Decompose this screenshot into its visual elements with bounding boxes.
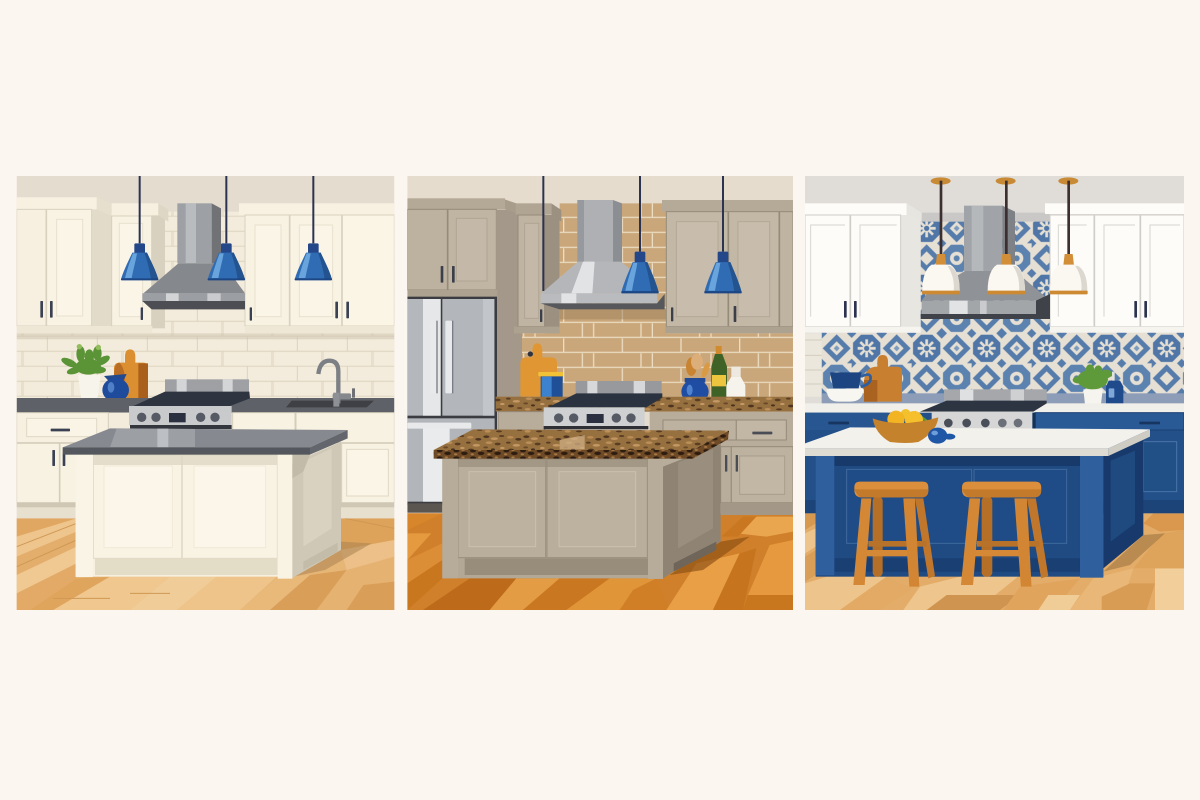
wood floor [17,518,394,610]
subway tile backsplash [17,212,394,402]
island [63,428,348,579]
stove [129,379,250,429]
upper cabinet beside hood [112,203,168,333]
cutting board [864,355,902,402]
potted plant [60,344,111,400]
blue gourd decor [928,428,955,444]
pendant light 2 [208,176,245,280]
faucet and sink [286,361,374,407]
range hood [142,203,245,309]
pendant light cord behind cabinet [542,176,544,291]
range hood [541,200,665,309]
wall [805,176,1184,610]
white bottle [726,366,746,397]
upper cabinets right [1045,203,1184,333]
blue canister [538,372,563,400]
panel: greige kitchen with granite counters [407,139,793,610]
blue soap bottle [1106,372,1123,407]
counter [805,403,1184,413]
wooden utensils [686,354,711,379]
stove [920,389,1047,429]
stool 1 [853,482,935,587]
stool 2 [961,482,1048,587]
blue pot [102,374,129,398]
navy cup [830,372,871,388]
cutting board [114,349,148,398]
cutting board [520,343,557,397]
pendant light 1 [621,176,659,294]
counter [17,398,394,413]
shadow under upper cabinets [560,309,666,319]
fruit bowl [873,409,938,443]
granite counter [496,397,793,412]
base cabinets [805,413,1184,513]
base cabinets [17,413,394,518]
pendant light 1 [922,177,960,294]
blue pot [681,378,709,397]
pendant light 3 [1050,177,1088,294]
fridge [407,297,497,513]
potted plant [1073,364,1112,407]
pendant light 1 [121,176,158,280]
panel: white and navy kitchen with patterned tiles [805,176,1184,610]
island [434,429,729,579]
island [805,427,1150,578]
base cabinets [498,412,793,515]
tall cabinet and upper cabinets left [407,198,522,403]
white bowl [827,389,863,402]
panel: cream kitchen with grey counters [17,143,394,610]
upper cabinets left [805,203,922,333]
upper cabinets left [17,197,112,333]
wall [408,176,793,514]
shadow under upper cabinets [17,333,394,339]
patterned tile backsplash [805,213,1184,404]
range hood [921,206,1050,319]
pendant light 2 [987,177,1025,294]
upper cabinets right [662,200,793,333]
upper cabinets right [239,203,394,333]
pendant light 3 [294,176,332,280]
wood floor [805,513,1184,610]
stove [544,381,662,429]
wood floor [407,513,793,610]
brick tile backsplash [521,203,793,398]
upper cabinet beside hood [514,203,561,333]
wine bottle [711,346,727,402]
pendant light 2 [704,176,742,294]
wall [16,176,394,398]
